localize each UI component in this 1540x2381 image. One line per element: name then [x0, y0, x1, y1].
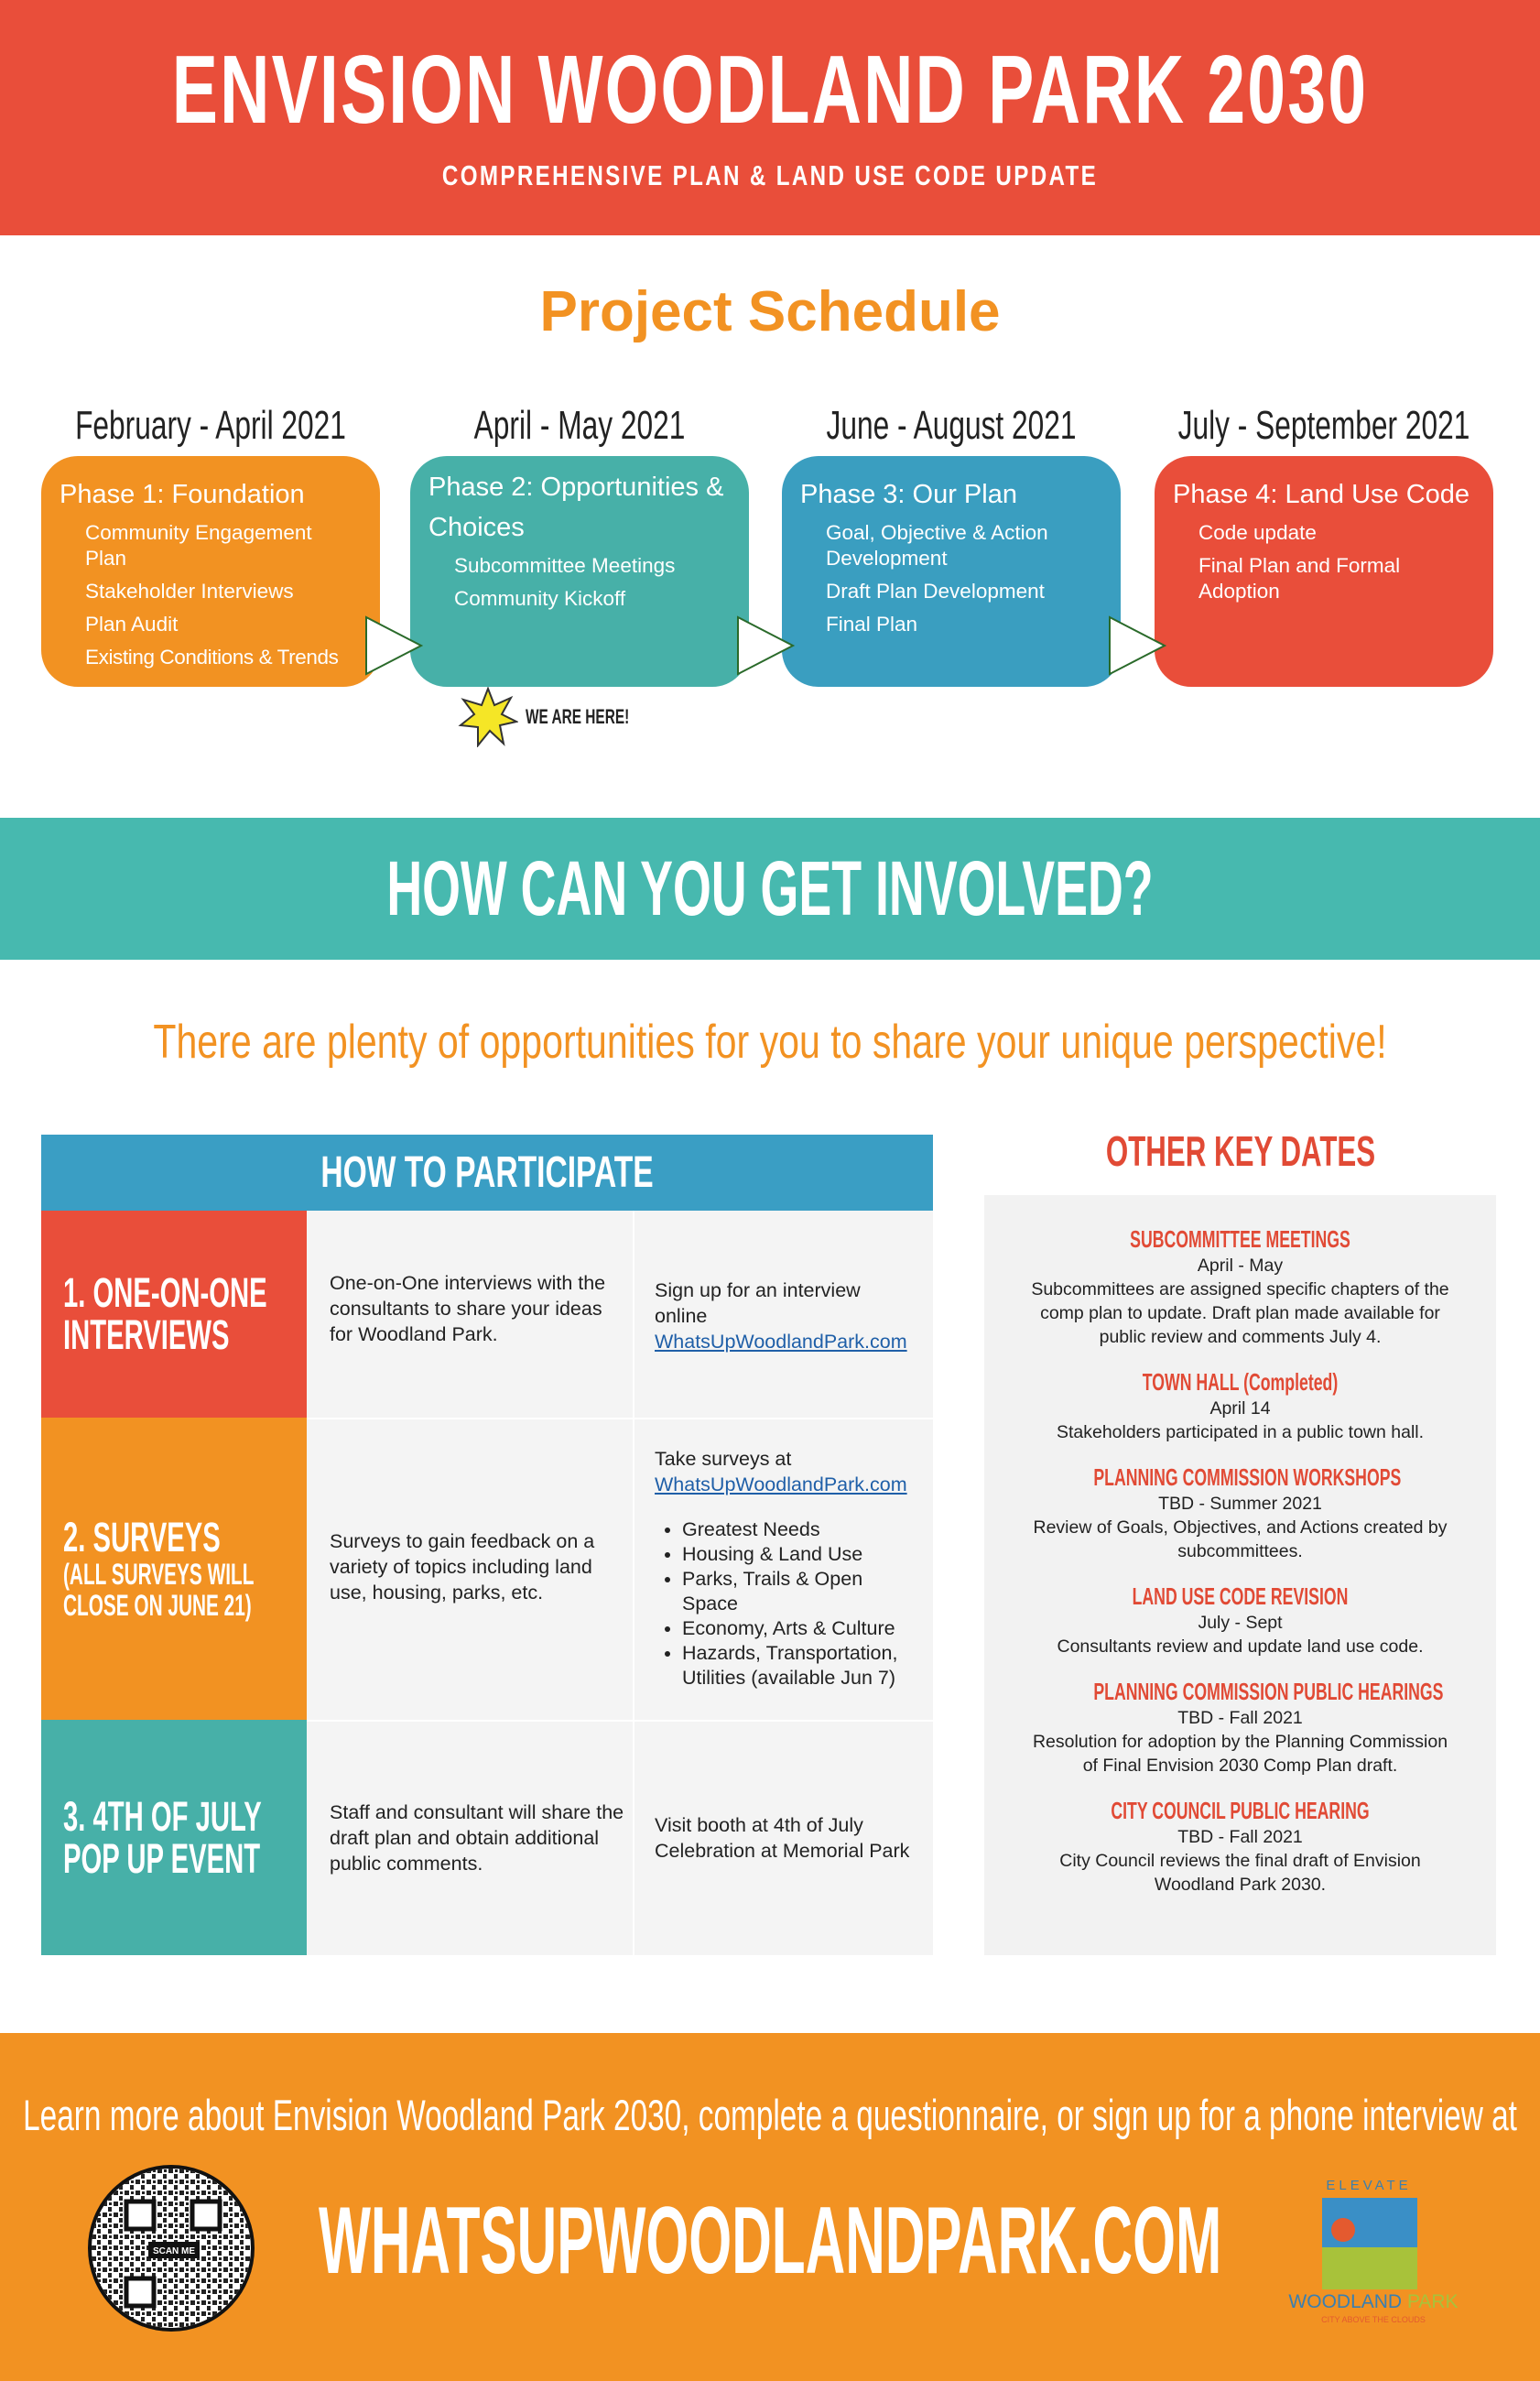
key date: planning workshops	[1033, 1463, 1447, 1561]
header band	[0, 0, 1540, 235]
panel: phase 2	[410, 456, 749, 687]
icon: qr code: SCAN ME	[153, 2246, 195, 2256]
key date: subcommittee	[1031, 1225, 1449, 1347]
key date: town hall: April 14	[1209, 1398, 1271, 1419]
panel: phase 1	[41, 456, 380, 687]
row 1 label: INTERVIEWS	[63, 1311, 229, 1358]
row 1 action: Sign up for an interview online WhatsUpWoodlandPark.com	[655, 1279, 907, 1353]
key date: land use code: LAND USE CODE REVISION	[1133, 1582, 1348, 1610]
panel: phase 1: Stakeholder Interviews	[85, 580, 294, 603]
logo: woodland park: ELEVATE	[1326, 2178, 1412, 2193]
row 3 label: POP UP EVENT	[63, 1835, 260, 1881]
panel: phase 3: Draft Plan Development	[826, 580, 1045, 603]
logo: woodland park: CITY ABOVE THE CLOUDS	[1321, 2315, 1426, 2324]
panel: phase 2: Subcommittee Meetings	[454, 554, 675, 577]
row 3 label	[41, 1720, 307, 1955]
table header: HOW TO PARTICIPATE	[320, 1148, 654, 1197]
panel: phase 1: Existing Conditions & Trends	[85, 646, 338, 669]
table header	[41, 1135, 933, 1211]
key date: town hall: Stakeholders participated in a public town hall.	[1057, 1422, 1424, 1442]
row 2 label: (ALL SURVEYS WILL	[63, 1558, 254, 1591]
row 2 action: Hazards, Transportation, Utilities (available Jun 7)	[682, 1642, 897, 1689]
date: phase 2: April - May 2021	[474, 403, 685, 448]
icon: star we are here	[458, 687, 629, 747]
subtitle: COMPREHENSIVE PLAN & LAND USE CODE UPDATE	[442, 159, 1098, 191]
text: opportunities subtitle: There are plenty of opportunities for you to share your unique perspective!	[153, 1016, 1387, 1069]
key date: town hall: TOWN HALL (Completed)	[1143, 1368, 1338, 1396]
row 3 description: Staff and consultant will share the draft plan and obtain additional public comments.	[330, 1801, 624, 1875]
panel: phase 1: Plan	[85, 547, 126, 570]
panel: phase 3: Phase 3: Our Plan	[800, 480, 1017, 509]
row 2 action: Take surveys at WhatsUpWoodlandPark.com	[655, 1448, 907, 1495]
panel: phase 4: Code update	[1198, 521, 1317, 544]
panel: phase 2: Community Kickoff	[454, 587, 625, 610]
key date: subcommittee: SUBCOMMITTEE MEETINGS	[1130, 1225, 1350, 1253]
panel: phase 1: Plan Audit	[85, 613, 178, 636]
key date: land use code	[1057, 1582, 1424, 1657]
heading: project schedule: Project Schedule	[539, 280, 1001, 343]
key date: city council: CITY COUNCIL PUBLIC HEARING	[1111, 1797, 1370, 1824]
panel: phase 3	[782, 456, 1121, 687]
panel: phase 3: Goal, Objective & Action Development	[826, 521, 1048, 570]
key date: city council: TBD - Fall 2021	[1177, 1827, 1303, 1847]
date: phase 3: June - August 2021	[826, 403, 1077, 448]
footer band	[0, 2033, 1540, 2381]
table: how to participate	[41, 1135, 933, 1955]
key date: land use code: July - Sept	[1198, 1613, 1283, 1633]
panel: phase 2: Phase 2: Opportunities & Choices	[428, 473, 723, 542]
row 3 action: Visit booth at 4th of July Celebration at Memorial Park	[655, 1814, 909, 1862]
key date: city council	[1059, 1797, 1421, 1895]
logo: woodland park: WOODLAND PARK	[1288, 2291, 1459, 2312]
row 3 label: 3. 4TH OF JULY	[63, 1793, 262, 1839]
arrow 2	[738, 617, 793, 674]
key date: planning workshops: PLANNING COMMISSION WORKSHOPS	[1093, 1463, 1401, 1491]
row 1 description: One-on-One interviews with the consultants to share your ideas for Woodland Park.	[330, 1272, 605, 1345]
panel: phase 4	[1155, 456, 1493, 687]
arrow 1	[366, 617, 421, 674]
panel: phase 4: Phase 4: Land Use Code	[1173, 480, 1470, 509]
date: phase 1: February - April 2021	[75, 403, 346, 448]
row 2 description: Surveys to gain feedback on a variety of topics including land use, housing, parks, etc.	[330, 1530, 594, 1604]
row 2 action: Housing & Land Use	[682, 1543, 862, 1565]
row 1 label	[41, 1211, 307, 1418]
row 2 action	[655, 1448, 907, 1689]
panel: other key dates	[984, 1195, 1496, 1955]
key date: planning workshops: Review of Goals, Objectives, and Actions created by subcommittees.	[1033, 1517, 1447, 1561]
band: how can you get involved	[0, 818, 1540, 960]
key date: public hearings: Resolution for adoption by the Planning Commission of Final Envision 2030 Comp Plan draft.	[1033, 1732, 1448, 1776]
panel: phase 1: Phase 1: Foundation	[60, 480, 305, 509]
key date: public hearings: TBD - Fall 2021	[1177, 1708, 1303, 1728]
band: how can you get involved: HOW CAN YOU GET INVOLVED?	[386, 845, 1154, 931]
heading: other key dates: OTHER KEY DATES	[1105, 1127, 1375, 1175]
key date: subcommittee: April - May	[1198, 1256, 1283, 1276]
panel: phase 1: Community Engagement	[85, 521, 312, 544]
row 2 action: Greatest Needs	[682, 1518, 820, 1540]
date: phase 4: July - September 2021	[1178, 403, 1470, 448]
key date: planning workshops: TBD - Summer 2021	[1158, 1494, 1322, 1514]
key date: town hall	[1057, 1368, 1424, 1442]
arrow 3	[1110, 617, 1165, 674]
key date: subcommittee: Subcommittees are assigned specific chapters of the comp plan to update. Draft plan made available for public review and comments July 4.	[1031, 1279, 1449, 1347]
row 2 label: CLOSE ON JUNE 21)	[63, 1589, 252, 1622]
row 2 action: Parks, Trails & Open Space	[682, 1568, 862, 1615]
key date: city council: City Council reviews the final draft of Envision Woodland Park 2030.	[1059, 1851, 1421, 1895]
panel: phase 3: Final Plan	[826, 613, 917, 636]
icon: star we are here: WE ARE HERE!	[526, 705, 629, 728]
row 2 label: 2. SURVEYS	[63, 1514, 221, 1560]
panel: phase 4: Final Plan and Formal Adoption	[1198, 554, 1400, 603]
row 2 action: Economy, Arts & Culture	[682, 1617, 895, 1639]
arrows	[365, 615, 1166, 676]
key date: public hearings	[1033, 1678, 1448, 1776]
row 2 label	[41, 1418, 307, 1720]
logo: woodland park	[1288, 2178, 1459, 2324]
url: WHATSUPWOODLANDPARK.COM	[319, 2188, 1221, 2294]
key date: land use code: Consultants review and update land use code.	[1057, 1636, 1424, 1657]
footer text: Learn more about Envision Woodland Park 2030, complete a questionnaire, or sign up for a phone interview at	[23, 2091, 1517, 2139]
icon: qr code	[88, 2165, 255, 2332]
key date: public hearings: PLANNING COMMISSION PUBLIC HEARINGS	[1093, 1678, 1443, 1705]
title: ENVISION WOODLAND PARK 2030	[172, 36, 1368, 144]
row 1 label: 1. ONE-ON-ONE	[63, 1269, 267, 1316]
